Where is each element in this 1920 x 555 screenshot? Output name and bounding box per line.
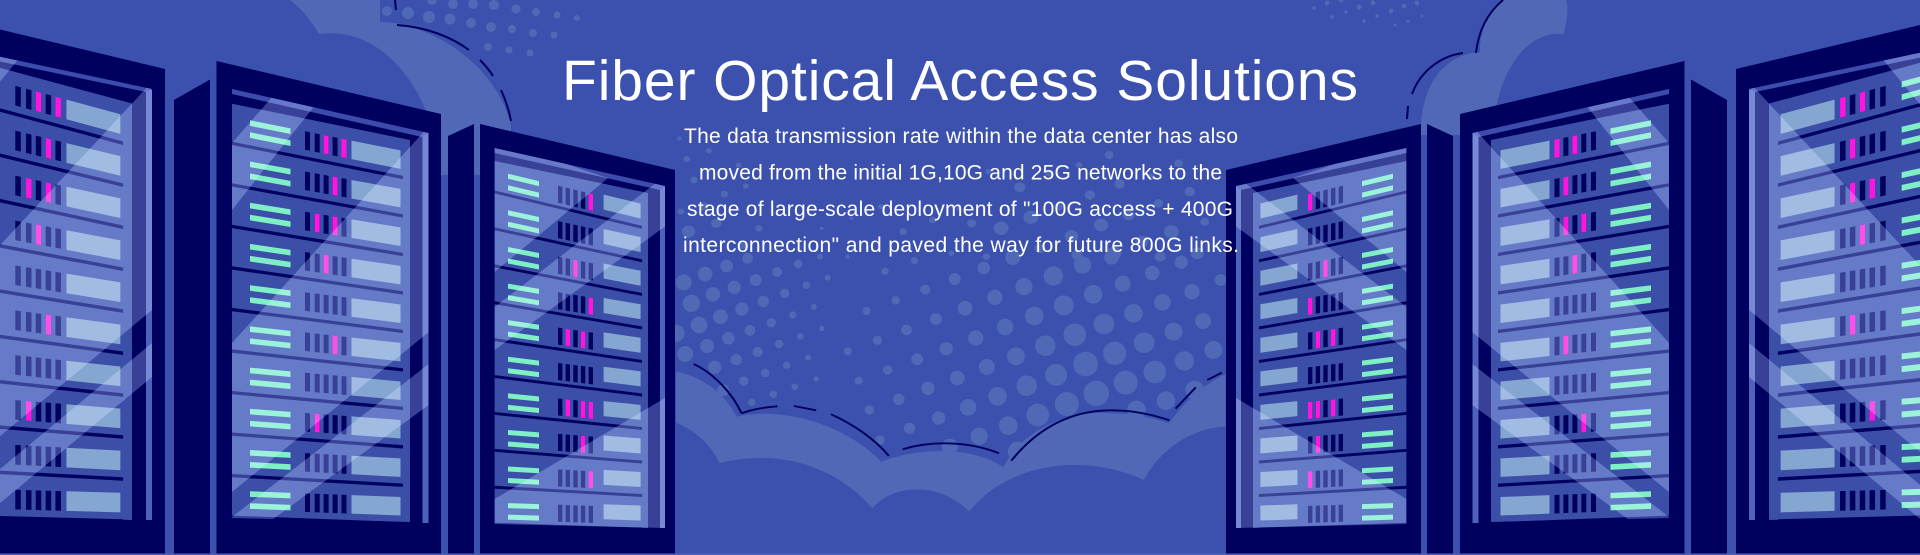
dashed cloud outline: top left bbox=[395, 0, 511, 121]
cloud: bottom centre bbox=[676, 372, 1226, 555]
server racks: left group bbox=[0, 20, 675, 555]
server rack 1 bbox=[0, 20, 165, 555]
upper centre dot pattern bbox=[677, 136, 1209, 262]
title: Fiber Optical Access Solutions bbox=[562, 49, 1358, 113]
dashed cloud outline: top right bbox=[1407, 0, 1503, 119]
server rack 2 bbox=[174, 61, 441, 555]
description paragraph: stage of large-scale deployment of "100G access + 400G bbox=[687, 198, 1233, 221]
lower centre dot pattern bbox=[667, 250, 1227, 462]
bottom edge line bbox=[0, 554, 1920, 555]
dashed cloud outline: bottom centre bbox=[694, 364, 1222, 461]
cloud: top right bbox=[1421, 0, 1568, 135]
description paragraph: The data transmission rate within the data center has also bbox=[684, 125, 1238, 148]
description paragraph: interconnection" and paved the way for future 800G links. bbox=[683, 234, 1239, 257]
server rack 3 bbox=[448, 124, 675, 555]
top left dot pattern bbox=[382, 0, 580, 56]
cloud: top left bbox=[0, 0, 511, 175]
description paragraph bbox=[683, 125, 1239, 257]
top right dot pattern bbox=[1312, 0, 1424, 26]
description paragraph: moved from the initial 1G,10G and 25G networks to the bbox=[699, 162, 1222, 184]
server racks: right group (mirrored) bbox=[1226, 20, 1920, 555]
